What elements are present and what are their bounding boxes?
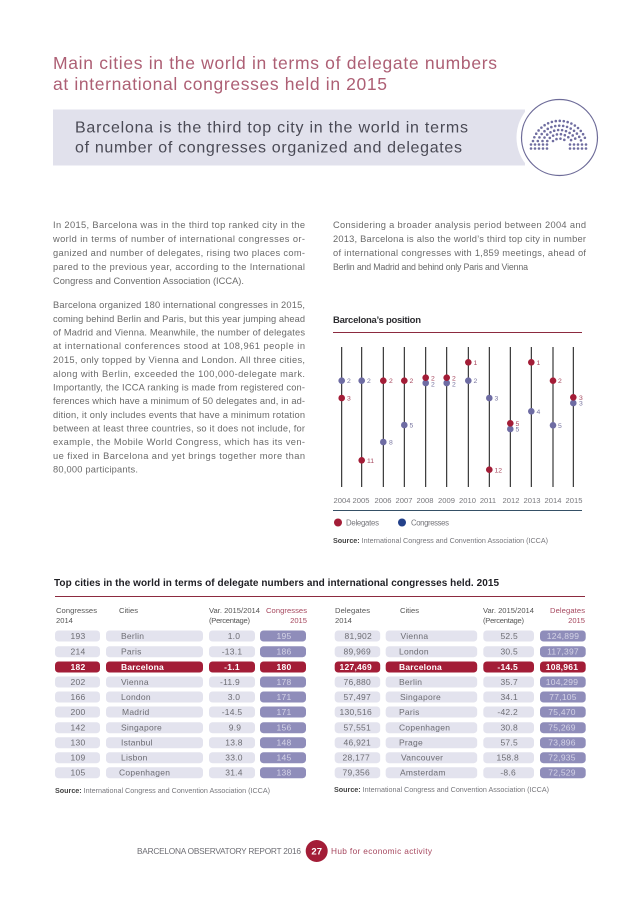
row: Berlin: 104,299 [546, 677, 578, 687]
row: Barcelona: -1.1 [224, 662, 240, 672]
row: Istanbul: Istanbul [121, 738, 153, 748]
chart: position by year: 3 [494, 396, 498, 402]
chart: position by year: 2013 [524, 496, 540, 505]
row: Singapore: 9.9 [229, 723, 241, 733]
row: Vancouver: Vancouver [401, 753, 443, 763]
row: Madrid: -14.5 [222, 707, 242, 717]
row: Madrid: 200 [71, 707, 85, 717]
row: Amsterdam [335, 767, 586, 778]
row: Berlin: 76,880 [344, 677, 371, 687]
row: Copenhagen [55, 767, 306, 778]
row: Lisbon: 33.0 [225, 753, 243, 763]
chart: position by year: 2008 [417, 496, 433, 505]
row: Paris [335, 706, 586, 718]
chart legend: Delegates [346, 518, 379, 528]
row: Vancouver: 158.8 [496, 753, 519, 763]
table header: congresses: Congresses [266, 606, 307, 615]
text block: left column: 80,000 participants. [53, 464, 138, 474]
row: Vancouver [335, 752, 586, 763]
footer: Hub for economic activity [331, 846, 433, 856]
chart: position by year: 2 [431, 376, 435, 382]
row: London: 3.0 [228, 692, 240, 702]
title: Main cities in the world in terms of delegate numbers [53, 53, 497, 73]
row: Amsterdam: Amsterdam [400, 768, 446, 778]
row: Prage: 46,921 [344, 738, 371, 748]
row: Paris: 130,516 [340, 707, 372, 717]
row: Copenhagen: Copenhagen [119, 768, 170, 778]
text block: left column: between at least three countries, so it does not include, for [53, 424, 305, 434]
row: Istanbul: 130 [71, 738, 85, 748]
chart: position by year: 3 [579, 400, 583, 408]
chart heading: Barcelona’s position [333, 315, 421, 326]
table: congresses [55, 606, 307, 778]
source: delegates table: Source: International Congress and Convention Association (ICCA) [334, 785, 549, 794]
chart: position by year: 1 [536, 360, 540, 367]
text block: left column: dition, it only includes events that have a minimum rotation [53, 410, 305, 420]
chart: position by year: 5 [410, 422, 414, 430]
chart legend [334, 518, 449, 528]
row: London [55, 692, 306, 702]
row: Copenhagen [335, 722, 586, 733]
table header: congresses: (Percentage) [209, 616, 250, 625]
row: Paris: Paris [399, 707, 420, 717]
table header: delegates: Delegates [550, 606, 585, 615]
row: London: 117,397 [547, 647, 579, 657]
row: London: 89,969 [344, 647, 371, 657]
row: Berlin: Berlin [399, 677, 422, 687]
banner: key message [53, 110, 525, 166]
chart: position by year: 2 [431, 382, 435, 388]
text block: right column: Considering a broader analysis period between 2004 and [333, 220, 586, 230]
row: Vienna [335, 630, 586, 642]
text block: right column: Berlin and Madrid and behind only Paris and Vienna [333, 262, 528, 272]
row: Vienna: 178 [277, 677, 291, 687]
text block: left column: Congress and Convention Association (ICCA). [53, 276, 244, 286]
table: delegates [335, 606, 586, 778]
row: Vancouver: 72,935 [548, 753, 576, 763]
chart: position by year: 3 [579, 395, 583, 402]
chart: position by year: 5 [558, 423, 562, 430]
row: Paris: Paris [121, 647, 142, 657]
table header: congresses: 2014 [56, 616, 73, 625]
row: London: 30.5 [500, 647, 518, 657]
row: Vienna: Vienna [121, 677, 149, 687]
text block: right column: 2013, Barcelona is also the world’s third top city in number [333, 234, 586, 244]
chart: position by year: 2 [410, 378, 414, 385]
page number badge [306, 840, 328, 862]
text block: left column: example, the Mobile World Congress, which has its ven- [53, 437, 305, 447]
chart: position by year: 2 [347, 378, 351, 385]
chart: position by year: 4 [536, 409, 540, 416]
chart: position by year: 2 [367, 378, 371, 385]
table header: delegates: 2014 [335, 616, 352, 625]
row: Lisbon: 145 [277, 753, 291, 763]
row: Barcelona: 127,469 [340, 662, 372, 672]
chart: position by year: 2 [452, 382, 456, 388]
row: Berlin: 1.0 [228, 631, 240, 641]
row: Paris [55, 646, 306, 657]
row: Paris: -42.2 [497, 707, 518, 717]
row: Vienna: 81,902 [344, 631, 372, 641]
text block: left column: coming behind Berlin and Paris, but this year jumping ahead [53, 314, 305, 324]
row: Singapore: 34.1 [500, 692, 518, 702]
text block: left column: world in terms of number of international congresses or- [52, 234, 305, 244]
row: Paris: -13.1 [222, 647, 242, 657]
row: Amsterdam: 72,529 [548, 768, 576, 778]
chart: position by year: 2 [474, 378, 478, 385]
row: Copenhagen: 138 [277, 768, 291, 778]
row: Prage: 73,896 [548, 738, 576, 748]
row: Lisbon [55, 752, 306, 763]
row: Barcelona [335, 662, 586, 672]
row: Barcelona: Barcelona [399, 662, 442, 672]
row: Vienna: 52.5 [500, 631, 518, 641]
chart: position by year [333, 347, 583, 511]
row: Singapore: 156 [277, 723, 291, 733]
chart: position by year: 2 [389, 378, 393, 385]
row: Lisbon: 109 [71, 753, 85, 763]
row: Singapore [55, 722, 306, 733]
row: Prage [335, 737, 586, 748]
row: Barcelona [55, 662, 306, 672]
chart: position by year: 2006 [375, 496, 391, 505]
row: Copenhagen: 105 [71, 768, 85, 778]
text block: left column: Importantly, the ICCA ranking is made from registered con- [53, 382, 305, 392]
chart: position by year: 2012 [503, 496, 519, 505]
table header: delegates: 2015 [568, 616, 585, 625]
text block: left column [52, 220, 305, 474]
row: Vienna: 124,899 [547, 631, 579, 641]
chart: position by year: 2009 [438, 496, 455, 505]
title [53, 53, 497, 94]
row: Barcelona: 180 [277, 662, 291, 672]
row: Amsterdam: -8.6 [500, 768, 516, 778]
row: Singapore [335, 692, 586, 702]
row: Berlin: 193 [71, 631, 85, 641]
row: Vienna [55, 676, 306, 688]
row: Madrid [55, 706, 306, 718]
row: Barcelona: -14.5 [497, 662, 518, 672]
table header: delegates: Delegates [335, 606, 370, 615]
text block: right column: of international congresses with 1,859 meetings, ahead of [333, 248, 586, 258]
table header: delegates [335, 606, 585, 625]
row: Barcelona: 182 [71, 662, 85, 672]
text block: left column: ganized and number of delegates, rising two places com- [53, 248, 305, 258]
table header: delegates: Var. 2015/2014 [483, 606, 534, 615]
chart: position by year: 2011 [480, 496, 496, 505]
chart legend: Congresses [411, 518, 449, 528]
row: Singapore: 77,105 [549, 692, 577, 702]
chart: position by year: 2 [452, 376, 456, 382]
text block: left column: pared to the previous year, according to the International [53, 262, 305, 272]
chart: position by year: 3 [347, 396, 351, 402]
row: Lisbon: Lisbon [121, 753, 148, 763]
chart: position by year: 2005 [353, 496, 369, 505]
footer: BARCELONA OBSERVATORY REPORT 2016 [137, 846, 301, 856]
row: Prage: 57.5 [500, 738, 518, 748]
table header: congresses: Cities [119, 606, 138, 615]
chart: position by year: 2004 [334, 496, 350, 505]
text block: left column: Barcelona organized 180 international congresses in 2015, [53, 300, 305, 310]
row: London [335, 646, 586, 657]
chart: position by year: 11 [367, 458, 374, 465]
row: Vancouver: 28,177 [342, 753, 370, 763]
row: Vienna: 202 [71, 677, 85, 687]
row: Vienna: Vienna [400, 631, 428, 641]
text block: left column: at international conferences stood at 108,961 people in [53, 341, 305, 351]
row: Berlin: 195 [277, 631, 291, 641]
chart: position by year: 5 [516, 421, 520, 428]
banner: key message: Barcelona is the third top city in the world in terms [75, 120, 468, 136]
row: Berlin: Berlin [121, 631, 144, 641]
banner: key message: of number of congresses organized and delegates [75, 140, 462, 156]
chart: position by year: 12 [494, 467, 502, 474]
row: Istanbul: 148 [277, 738, 291, 748]
row: Paris: 214 [71, 647, 85, 657]
row: Amsterdam: 79,356 [342, 768, 370, 778]
page number badge: 27 [311, 846, 322, 858]
text block: left column: 2015, only topped by Vienna and London. All three cities, [53, 355, 305, 365]
row: Copenhagen: 31.4 [225, 768, 243, 778]
row: Barcelona: Barcelona [121, 662, 164, 672]
chart: position by year: 1 [474, 360, 478, 367]
row: Istanbul: 13.8 [225, 738, 243, 748]
table heading: Top cities in the world in terms of delegate numbers and international congresses held. 2015 [54, 578, 499, 589]
table header: congresses [56, 606, 307, 625]
table header: congresses: Congresses [56, 606, 97, 615]
chart: position by year: 2 [558, 378, 562, 385]
row: Vienna: -11.9 [220, 677, 240, 687]
row: Madrid: Madrid [122, 707, 150, 717]
text block: left column: of Madrid and Vienna. Meanwhile, the number of delegates [53, 328, 305, 338]
row: Istanbul [55, 737, 306, 748]
row: Copenhagen: Copenhagen [399, 723, 450, 733]
chart: position by year: 2014 [545, 496, 561, 505]
source: congresses table: Source: International Congress and Convention Association (ICCA) [55, 786, 270, 795]
chart source: Source: International Congress and Convention Association (ICCA) [333, 536, 548, 545]
text block: left column: along with Berlin, exceeded the 100,000-delegate mark. [53, 369, 305, 379]
icon: hemicycle in circle [516, 94, 602, 180]
text block: left column: ue fixed in Barcelona and yet brings together more than [53, 451, 305, 461]
row: Copenhagen: 57,551 [344, 723, 371, 733]
chart: position by year: 2010 [459, 496, 476, 505]
row: Prage: Prage [399, 738, 423, 748]
text block: right column [333, 220, 586, 272]
row: Copenhagen: 30.8 [500, 723, 518, 733]
table header: congresses: 2015 [290, 616, 307, 625]
table header: congresses: Var. 2015/2014 [209, 606, 260, 615]
table header: delegates: (Percentage) [483, 616, 524, 625]
title: at international congresses held in 2015 [53, 74, 387, 94]
row: London: London [399, 647, 429, 657]
row: London: London [121, 692, 151, 702]
chart: position by year: 8 [389, 440, 393, 446]
row: Berlin [55, 630, 306, 642]
row: Paris: 186 [277, 647, 291, 657]
row: Barcelona: 108,961 [546, 662, 578, 672]
row: London: 171 [277, 692, 291, 702]
row: Singapore: Singapore [400, 692, 441, 702]
chart: position by year: 2007 [396, 496, 412, 505]
footer [137, 840, 433, 862]
row: Berlin [335, 676, 586, 688]
row: Copenhagen: 75,269 [548, 723, 576, 733]
row: Singapore: 142 [71, 723, 85, 733]
row: London: 166 [71, 692, 85, 702]
row: Berlin: 35.7 [500, 677, 518, 687]
row: Madrid: 171 [277, 707, 291, 717]
chart: position by year: 5 [516, 426, 520, 434]
row: Singapore: 57,497 [344, 692, 371, 702]
chart: position by year: 2015 [566, 496, 582, 505]
row: Singapore: Singapore [121, 723, 162, 733]
text block: left column: ferences which have a minimum of 50 delegates and, in ad- [53, 396, 305, 406]
table header: delegates: Cities [400, 606, 419, 615]
text block: left column: In 2015, Barcelona was in the third top ranked city in the [53, 220, 305, 230]
row: Paris: 75,470 [548, 707, 576, 717]
